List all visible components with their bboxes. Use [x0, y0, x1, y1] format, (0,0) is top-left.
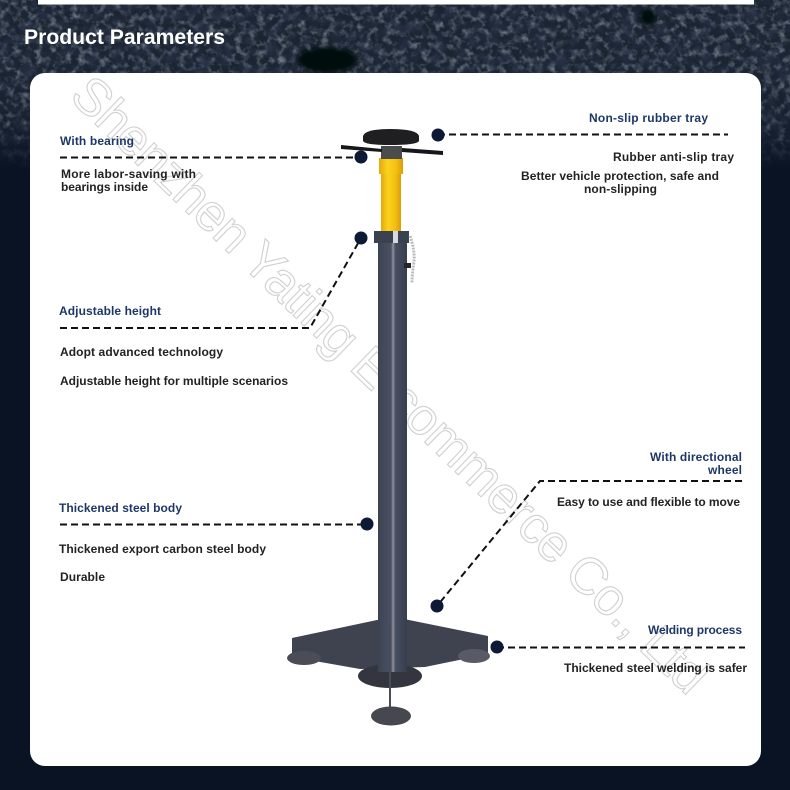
- pole collar: [374, 231, 409, 243]
- handle bar: [341, 145, 382, 152]
- watermark: Shenzhen Yating E-commerce Co., Ltd: [60, 65, 720, 705]
- rubber tray: [363, 129, 419, 145]
- bottom disc: [371, 706, 411, 726]
- knob: [404, 263, 411, 268]
- lower pole: [378, 240, 407, 672]
- callout: adjustable height: Adopt advanced technology: [60, 345, 223, 359]
- callout: non-slip rubber tray: non-slipping: [584, 182, 657, 196]
- callout: with bearing: bearings inside: [61, 180, 148, 194]
- nut: [381, 146, 402, 159]
- callout: welding process: Welding process: [648, 623, 742, 637]
- callout: with bearing: With bearing: [60, 134, 134, 148]
- callout: welding process: Thickened steel welding is safer: [564, 661, 747, 675]
- callout: with directional wheel: wheel: [707, 463, 742, 477]
- top white rule: [38, 0, 754, 4]
- callout: with bearing: [60, 134, 368, 194]
- product: stand: [287, 129, 490, 726]
- chain: [410, 236, 414, 283]
- callout: adjustable height: Adjustable height: [59, 304, 161, 318]
- callout: thickened steel body: Thickened steel body: [59, 501, 182, 515]
- callout: non-slip rubber tray: Non-slip rubber tray: [589, 111, 708, 125]
- base plate: [292, 619, 488, 669]
- callout: with directional wheel: [430, 450, 742, 612]
- callout: non-slip rubber tray: Rubber anti-slip tray: [613, 150, 734, 164]
- callout: thickened steel body: Durable: [60, 570, 105, 584]
- left foot: [287, 651, 321, 665]
- callout: with directional wheel: Easy to use and flexible to move: [557, 495, 740, 509]
- callout: adjustable height: [59, 232, 368, 388]
- callout: non-slip rubber tray: [432, 111, 734, 196]
- right foot: [458, 649, 490, 663]
- ground spike: [389, 625, 391, 709]
- callout: adjustable height: Adjustable height for multiple scenarios: [60, 374, 288, 388]
- callout: welding process: [490, 623, 747, 675]
- callout: with directional wheel: With directional: [650, 450, 742, 464]
- title: Product Parameters: [24, 25, 225, 49]
- yellow inner tube: [381, 171, 401, 231]
- callout: non-slip rubber tray: Better vehicle protection, safe and: [521, 169, 719, 183]
- callout: thickened steel body: [59, 501, 374, 584]
- callout: with bearing: More labor-saving with: [61, 167, 196, 181]
- centre foot: [358, 664, 422, 688]
- callout: thickened steel body: Thickened export carbon steel body: [59, 542, 266, 556]
